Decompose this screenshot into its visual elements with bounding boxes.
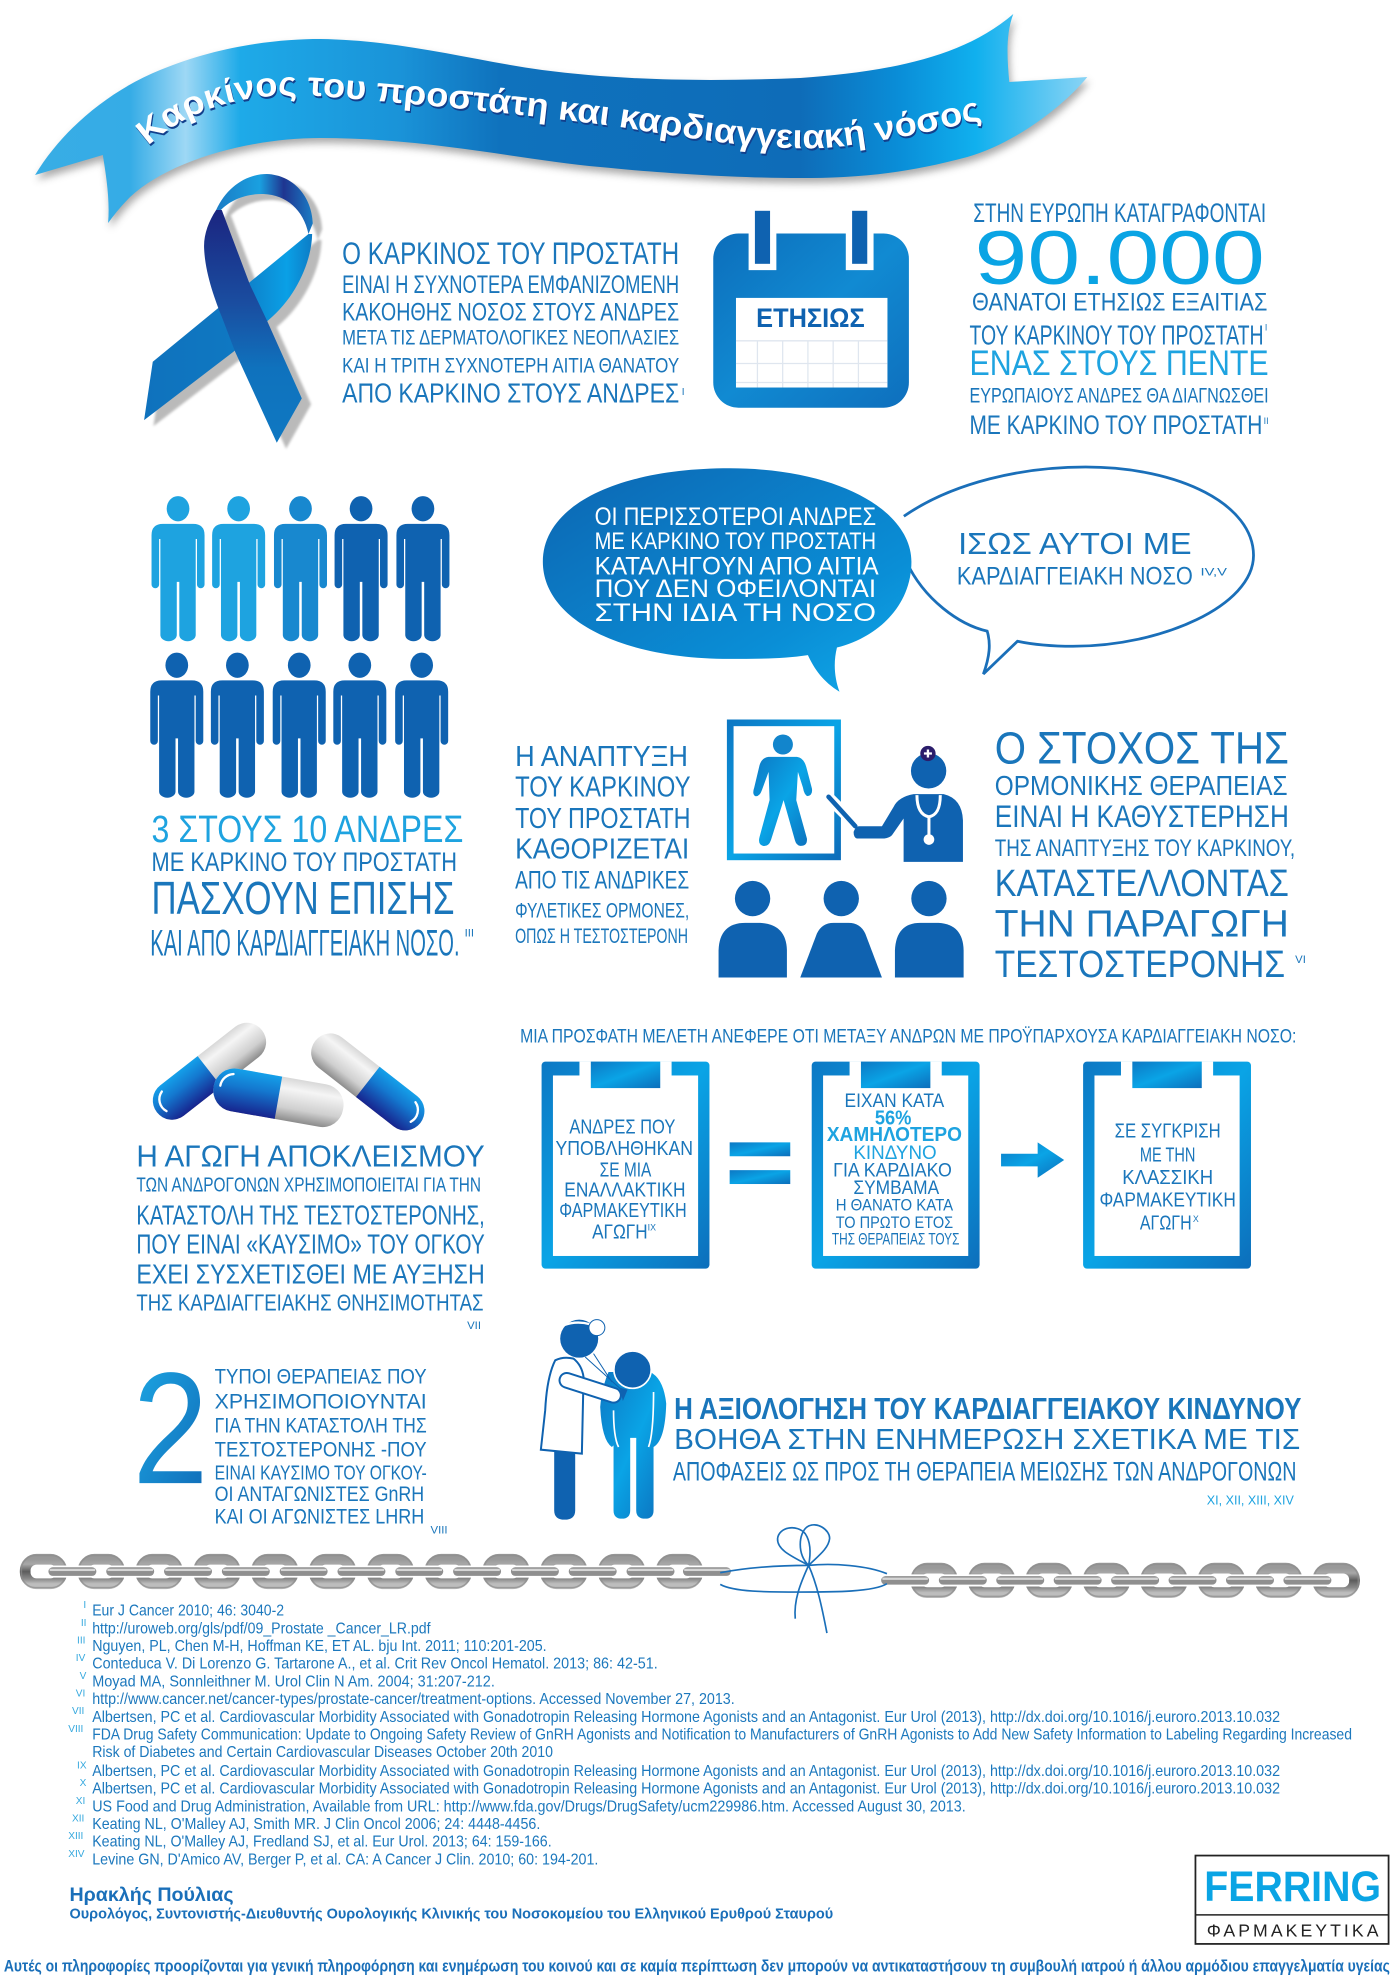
clipboard: compared with classic therapy: X xyxy=(1193,1214,1199,1224)
text block: 90.000 deaths in Europe: ΕΥΡΩΠΑΙΟΥΣ ΑΝΔΡΕΣ ΘΑ ΔΙΑΓΝΩΣΘΕΙ xyxy=(969,384,1269,408)
text block: goal of hormone therapy: ΤΕΣΤΟΣΤΕΡΟΝΗΣ xyxy=(995,944,1285,986)
clipboard: 56% lower risk: ΣΥΜΒΑΜΑ xyxy=(853,1178,940,1199)
clipboard: 56% lower risk: ΤΗΣ ΘΕΡΑΠΕΙΑΣ ΤΟΥΣ xyxy=(832,1231,959,1249)
text block: development determined by hormones: ΑΠΟ ΤΙΣ ΑΝΔΡΙΚΕΣ xyxy=(515,867,689,895)
text block: cardiovascular risk assessment xyxy=(673,1393,1301,1508)
text block: goal of hormone therapy: ΤΗΝ ΠΑΡΑΓΩΓΗ xyxy=(995,904,1289,946)
clipboard: 56% lower risk: ΧΑΜΗΛΟΤΕΡΟ xyxy=(827,1124,962,1146)
clipboard: men on alternative therapy: IX xyxy=(648,1223,656,1233)
clipboard: compared with classic therapy: ΑΓΩΓΗ xyxy=(1140,1212,1192,1234)
text block: goal of hormone therapy: ΤΗΣ ΑΝΑΠΤΥΞΗΣ ΤΟΥ ΚΑΡΚΙΝΟΥ, xyxy=(995,835,1295,862)
text block: two therapy types: ΤΕΣΤΟΣΤΕΡΟΝΗΣ -ΠΟΥ xyxy=(215,1438,427,1462)
illustration: chain tied with string xyxy=(21,1525,1358,1633)
text block: two therapy types: ΚΑΙ ΟΙ ΑΓΩΝΙΣΤΕΣ LHRH xyxy=(215,1505,424,1529)
text block: 3 in 10 men: 3 ΣΤΟΥΣ 10 ΑΝΔΡΕΣ xyxy=(152,809,463,851)
text block: prostate cancer frequency: ΚΑΚΟΗΘΗΣ ΝΟΣΟΣ ΣΤΟΥΣ ΑΝΔΡΕΣ xyxy=(342,299,679,327)
references list: V xyxy=(80,1671,87,1682)
text block: 90.000 deaths in Europe: II xyxy=(1264,416,1269,426)
text block: cardiovascular risk assessment: XI, XII, XIII, XIV xyxy=(1207,1494,1294,1508)
references list: Risk of Diabetes and Certain Cardiovascular Diseases October 20th 2010 xyxy=(92,1744,553,1761)
author credit: Ουρολόγος, Συντονιστής-Διευθυντής Ουρολογικής Κλινικής του Νοσοκομείου του Ελληνικού Ερυθρού Σταυρού xyxy=(69,1907,833,1923)
logo: Ferring: FERRING xyxy=(1204,1863,1381,1911)
references list: XI xyxy=(76,1796,85,1807)
bubble text: maybe those with heart disease xyxy=(957,528,1228,590)
bubble text: most men die of other causes: ΚΑΤΑΛΗΓΟΥΝ ΑΠΟ ΑΙΤΙΑ xyxy=(595,552,879,580)
text block: 3 in 10 men: III xyxy=(465,928,474,940)
title: Καρκίνος του προστάτη και καρδιαγγειακή νόσος xyxy=(135,77,982,156)
bubble text: maybe those with heart disease: ΚΑΡΔΙΑΓΓΕΙΑΚΗ ΝΟΣΟ xyxy=(957,562,1193,590)
icon: arrow xyxy=(1001,1142,1064,1178)
clipboard: 56% lower risk: ΤΟ ΠΡΩΤΟ ΕΤΟΣ xyxy=(836,1214,953,1232)
text block: prostate cancer frequency: ΚΑΙ Η ΤΡΙΤΗ ΣΥΧΝΟΤΕΡΗ ΑΙΤΙΑ ΘΑΝΑΤΟΥ xyxy=(342,353,679,377)
bubble text: maybe those with heart disease: ΙΣΩΣ ΑΥΤΟΙ ΜΕ xyxy=(958,528,1192,561)
references list: Levine GN, D'Amico AV, Berger P, et al. CA: A Cancer J Clin. 2010; 60: 194-201. xyxy=(92,1851,598,1868)
references list: US Food and Drug Administration, Available from URL: http://www.fda.gov/Drugs/DrugSafety/ucm229986.htm. Accessed August 30, 2013. xyxy=(92,1798,966,1815)
text block: 90.000 deaths in Europe: ΜΕ ΚΑΡΚΙΝΟ ΤΟΥ ΠΡΟΣΤΑΤΗ xyxy=(969,410,1262,440)
bubble text: most men die of other causes: ΣΤΗΝ ΙΔΙΑ ΤΗ ΝΟΣΟ xyxy=(595,599,876,627)
text block: goal of hormone therapy: VI xyxy=(1295,954,1306,966)
references list: III xyxy=(77,1635,85,1646)
clipboard: compared with classic therapy xyxy=(1083,1062,1251,1269)
text block: two therapy types: ΤΥΠΟΙ ΘΕΡΑΠΕΙΑΣ ΠΟΥ xyxy=(215,1364,427,1388)
calendar label: ΕΤΗΣΙΩΣ xyxy=(756,303,865,333)
text block: development determined by hormones: Η ΑΝΑΠΤΥΞΗ xyxy=(515,741,688,773)
bubble text: most men die of other causes xyxy=(595,503,879,627)
text block: development determined by hormones: ΤΟΥ ΚΑΡΚΙΝΟΥ xyxy=(515,772,691,804)
clipboard: 56% lower risk xyxy=(812,1062,980,1269)
icon: calendar xyxy=(713,211,909,408)
text block: 3 in 10 men: ΠΑΣΧΟΥΝ ΕΠΙΣΗΣ xyxy=(152,872,454,924)
clipboard: 56% lower risk: Η ΘΑΝΑΤΟ ΚΑΤΑ xyxy=(836,1197,953,1215)
bubble text: maybe those with heart disease: IV,V xyxy=(1200,567,1228,579)
references list: Nguyen, PL, Chen M-H, Hoffman KE, ET AL. bju Int. 2011; 110:201-205. xyxy=(92,1638,547,1655)
references list: X xyxy=(80,1778,87,1789)
references list: http://uroweb.org/gls/pdf/09_Prostate _Cancer_LR.pdf xyxy=(92,1620,431,1637)
clipboard: men on alternative therapy: ΦΑΡΜΑΚΕΥΤΙΚΗ xyxy=(559,1200,687,1222)
clipboard: men on alternative therapy xyxy=(542,1062,709,1269)
text block: androgen deprivation therapy xyxy=(136,1140,485,1332)
bubble text: most men die of other causes: ΠΟΥ ΔΕΝ ΟΦΕΙΛΟΝΤΑΙ xyxy=(595,575,876,603)
references list: XIV xyxy=(68,1849,85,1860)
text block: goal of hormone therapy: Ο ΣΤΟΧΟΣ ΤΗΣ xyxy=(995,723,1289,774)
text block: goal of hormone therapy xyxy=(995,723,1306,986)
text block: prostate cancer frequency: ΕΙΝΑΙ Η ΣΥΧΝΟΤΕΡΑ ΕΜΦΑΝΙΖΟΜΕΝΗ xyxy=(342,271,679,299)
text block: goal of hormone therapy: ΕΙΝΑΙ Η ΚΑΘΥΣΤΕΡΗΣΗ xyxy=(995,798,1289,834)
pictogram: ten men, three highlighted xyxy=(150,496,449,798)
text block: development determined by hormones: ΚΑΘΟΡΙΖΕΤΑΙ xyxy=(515,833,689,865)
text block: goal of hormone therapy: ΚΑΤΑΣΤΕΛΛΟΝΤΑΣ xyxy=(995,863,1289,905)
text block: 90.000 deaths in Europe: I xyxy=(1265,323,1267,333)
text block: 3 in 10 men xyxy=(150,809,474,964)
text block: androgen deprivation therapy: ΚΑΤΑΣΤΟΛΗ ΤΗΣ ΤΕΣΤΟΣΤΕΡΟΝΗΣ, xyxy=(136,1199,485,1230)
text block: two therapy types: VIII xyxy=(431,1525,448,1537)
text block: prostate cancer frequency xyxy=(342,235,685,409)
text block: androgen deprivation therapy: VII xyxy=(467,1320,481,1332)
text block: cardiovascular risk assessment: ΒΟΗΘΑ ΣΤΗΝ ΕΝΗΜΕΡΩΣΗ ΣΧΕΤΙΚΑ ΜΕ ΤΙΣ xyxy=(674,1424,1300,1456)
text block: prostate cancer frequency: ΜΕΤΑ ΤΙΣ ΔΕΡΜΑΤΟΛΟΓΙΚΕΣ ΝΕΟΠΛΑΣΙΕΣ xyxy=(342,326,679,350)
text block: development determined by hormones: ΦΥΛΕΤΙΚΕΣ ΟΡΜΟΝΕΣ, xyxy=(515,899,689,923)
references list: VII xyxy=(72,1706,84,1717)
text block: 90.000 deaths in Europe xyxy=(969,198,1269,440)
clipboard: 56% lower risk: ΕΙΧΑΝ ΚΑΤΑ xyxy=(845,1091,945,1112)
bubble text: most men die of other causes: ΟΙ ΠΕΡΙΣΣΟΤΕΡΟΙ ΑΝΔΡΕΣ xyxy=(595,503,876,531)
references list: Albertsen, PC et al. Cardiovascular Morbidity Associated with Gonadotropin Releasing Hormone Agonists and an Antagonist. Eur Urol (2013), http://dx.doi.org/10.1016/j.euroro.2013.10.032 xyxy=(92,1781,1280,1798)
text block: development determined by hormones xyxy=(515,741,691,948)
references list: Eur J Cancer 2010; 46: 3040-2 xyxy=(92,1603,284,1620)
stat: number 2: 2 xyxy=(133,1339,208,1517)
text block: prostate cancer frequency: Ο ΚΑΡΚΙΝΟΣ ΤΟΥ ΠΡΟΣΤΑΤΗ xyxy=(342,235,679,271)
clipboard: men on alternative therapy: ΥΠΟΒΛΗΘΗΚΑΝ xyxy=(555,1138,693,1160)
text block: two therapy types: ΟΙ ΑΝΤΑΓΩΝΙΣΤΕΣ GnRH xyxy=(215,1482,424,1506)
text block: 90.000 deaths in Europe: ΕΝΑΣ ΣΤΟΥΣ ΠΕΝΤΕ xyxy=(969,344,1269,383)
text block: goal of hormone therapy: ΟΡΜΟΝΙΚΗΣ ΘΕΡΑΠΕΙΑΣ xyxy=(995,770,1288,801)
logo: Ferring: ΦΑΡΜΑΚΕΥΤΙΚΑ xyxy=(1207,1920,1379,1940)
references list: Moyad MA, Sonnleithner M. Urol Clin N Am. 2004; 31:207-212. xyxy=(92,1673,495,1690)
logo: Ferring xyxy=(1195,1856,1389,1944)
clipboard: 56% lower risk: ΚΙΝΔΥΝΟ xyxy=(853,1143,937,1164)
text block: androgen deprivation therapy: Η ΑΓΩΓΗ ΑΠΟΚΛΕΙΣΜΟΥ xyxy=(136,1140,485,1173)
references list: I xyxy=(83,1600,86,1611)
icon: capsules xyxy=(145,1015,432,1138)
text block: androgen deprivation therapy: ΤΩΝ ΑΝΔΡΟΓΟΝΩΝ ΧΡΗΣΙΜΟΠΟΙΕΙΤΑΙ ΓΙΑ ΤΗΝ xyxy=(136,1175,481,1197)
references list: Conteduca V. Di Lorenzo G. Tartarone A., et al. Crit Rev Oncol Hematol. 2013; 86: 42-51. xyxy=(92,1656,658,1673)
text block: 90.000 deaths in Europe: ΘΑΝΑΤΟΙ ΕΤΗΣΙΩΣ ΕΞΑΙΤΙΑΣ xyxy=(972,289,1267,317)
clipboard: men on alternative therapy: ΕΝΑΛΛΑΚΤΙΚΗ xyxy=(564,1180,685,1202)
clipboard: compared with classic therapy: ΦΑΡΜΑΚΕΥΤΙΚΗ xyxy=(1100,1190,1236,1212)
text block: 90.000 deaths in Europe: ΣΤΗΝ ΕΥΡΩΠΗ ΚΑΤΑΓΡΑΦΟΝΤΑΙ xyxy=(973,198,1266,228)
references list: II xyxy=(81,1618,86,1629)
text block: two therapy types xyxy=(215,1364,448,1537)
references list: IX xyxy=(77,1760,87,1771)
references list: Keating NL, O'Malley AJ, Fredland SJ, et al. Eur Urol. 2013; 64: 159-166. xyxy=(92,1834,552,1851)
text block: 90.000 deaths in Europe: ΤΟΥ ΚΑΡΚΙΝΟΥ ΤΟΥ ΠΡΟΣΤΑΤΗ xyxy=(969,320,1264,351)
text block: cardiovascular risk assessment: Η ΑΞΙΟΛΟΓΗΣΗ ΤΟΥ ΚΑΡΔΙΑΓΓΕΙΑΚΟΥ ΚΙΝΔΥΝΟΥ xyxy=(674,1393,1301,1426)
references list: Albertsen, PC et al. Cardiovascular Morbidity Associated with Gonadotropin Releasing Hormone Agonists and an Antagonist. Eur Urol (2013), http://dx.doi.org/10.1016/j.euroro.2013.10.032 xyxy=(92,1763,1280,1780)
clipboard: men on alternative therapy: ΣΕ ΜΙΑ xyxy=(600,1159,652,1181)
references list: VIII xyxy=(68,1724,83,1735)
clipboard: compared with classic therapy: ΜΕ ΤΗΝ xyxy=(1140,1144,1195,1166)
text block: two therapy types: ΓΙΑ ΤΗΝ ΚΑΤΑΣΤΟΛΗ ΤΗΣ xyxy=(215,1414,427,1438)
author credit: Ηρακλής Πούλιας xyxy=(69,1885,234,1906)
speech bubble: filled xyxy=(543,468,911,692)
text block: 3 in 10 men: ΜΕ ΚΑΡΚΙΝΟ ΤΟΥ ΠΡΟΣΤΑΤΗ xyxy=(152,847,457,877)
references list: IV xyxy=(76,1653,86,1664)
text block: androgen deprivation therapy: ΠΟΥ ΕΙΝΑΙ «ΚΑΥΣΙΜΟ» ΤΟΥ ΟΓΚΟΥ xyxy=(136,1228,485,1259)
clipboard: men on alternative therapy: ΑΓΩΓΗ xyxy=(592,1221,648,1243)
bubble text: most men die of other causes: ΜΕ ΚΑΡΚΙΝΟ ΤΟΥ ΠΡΟΣΤΑΤΗ xyxy=(595,528,876,555)
text block: prostate cancer frequency: ΑΠΟ ΚΑΡΚΙΝΟ ΣΤΟΥΣ ΑΝΔΡΕΣ xyxy=(342,378,679,409)
references list: Albertsen, PC et al. Cardiovascular Morbidity Associated with Gonadotropin Releasing Hormone Agonists and an Antagonist. Eur Urol (2013), http://dx.doi.org/10.1016/j.euroro.2013.10.032 xyxy=(92,1709,1280,1726)
clipboard: 56% lower risk: 56% xyxy=(875,1108,911,1130)
text block: development determined by hormones: ΤΟΥ ΠΡΟΣΤΑΤΗ xyxy=(515,803,691,835)
text block: 3 in 10 men: ΚΑΙ ΑΠΟ ΚΑΡΔΙΑΓΓΕΙΑΚΗ ΝΟΣΟ. xyxy=(150,923,460,964)
clipboard: 56% lower risk: ΓΙΑ ΚΑΡΔΙΑΚΟ xyxy=(833,1160,952,1181)
icon: doctor examining patient xyxy=(541,1320,666,1520)
text block: prostate cancer frequency: I xyxy=(682,387,685,398)
clipboard: compared with classic therapy: ΣΕ ΣΥΓΚΡΙΣΗ xyxy=(1115,1120,1221,1142)
icon: doctor presenting to audience xyxy=(719,723,964,978)
text block: development determined by hormones: ΟΠΩΣ Η ΤΕΣΤΟΣΤΕΡΟΝΗ xyxy=(515,924,688,948)
banner: title ribbon xyxy=(35,14,1090,228)
references list: http://www.cancer.net/cancer-types/prostate-cancer/treatment-options. Accessed November 27, 2013. xyxy=(92,1691,735,1708)
references list xyxy=(68,1600,1352,1868)
icon: awareness ribbon xyxy=(144,174,322,449)
text block: androgen deprivation therapy: ΤΗΣ ΚΑΡΔΙΑΓΓΕΙΑΚΗΣ ΘΝΗΣΙΜΟΤΗΤΑΣ xyxy=(136,1289,484,1315)
text block: two therapy types: ΕΙΝΑΙ ΚΑΥΣΙΜΟ ΤΟΥ ΟΓΚΟΥ- xyxy=(215,1462,427,1484)
stat: 90.000: 90.000 xyxy=(975,216,1265,301)
references list: XIII xyxy=(68,1831,83,1842)
text block: androgen deprivation therapy: ΕΧΕΙ ΣΥΣΧΕΤΙΣΘΕΙ ΜΕ ΑΥΞΗΣΗ xyxy=(136,1259,485,1290)
icon: equals sign xyxy=(730,1142,790,1184)
speech bubble: outlined xyxy=(904,467,1254,674)
clipboard: compared with classic therapy: ΚΛΑΣΣΙΚΗ xyxy=(1122,1167,1213,1189)
author credit xyxy=(69,1885,833,1923)
clipboard: men on alternative therapy: ΑΝΔΡΕΣ ΠΟΥ xyxy=(569,1117,676,1139)
references list: XII xyxy=(72,1813,84,1824)
references list: Keating NL, O'Malley AJ, Smith MR. J Clin Oncol 2006; 24: 4448-4456. xyxy=(92,1816,540,1833)
references list: VI xyxy=(76,1689,85,1700)
text block: two therapy types: ΧΡΗΣΙΜΟΠΟΙΟΥΝΤΑΙ xyxy=(215,1390,427,1414)
